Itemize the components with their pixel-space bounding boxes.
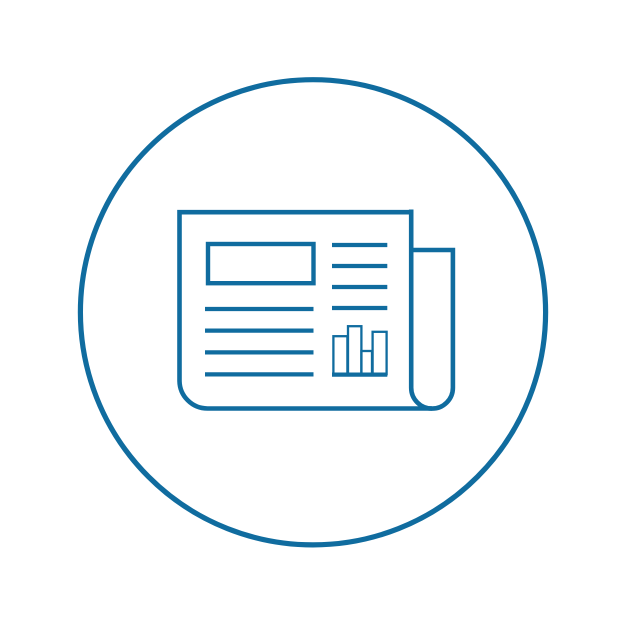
headline image box	[208, 244, 314, 283]
icon: circle outline	[80, 80, 546, 545]
bar chart	[332, 326, 387, 375]
left column text lines	[205, 309, 314, 374]
right column text lines	[332, 245, 387, 308]
chart bars	[333, 326, 387, 374]
icon: newspaper	[180, 210, 453, 409]
newspaper page outline	[180, 212, 432, 408]
newspaper fold flap	[411, 210, 453, 409]
chart baseline	[332, 373, 387, 377]
